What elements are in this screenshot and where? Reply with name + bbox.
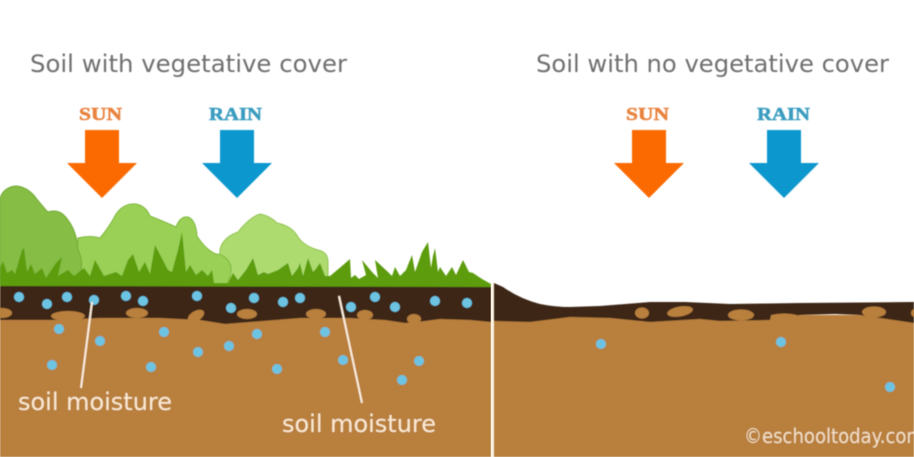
moisture dots right: [596, 337, 895, 392]
ground: dark topsoil: [0, 284, 491, 324]
leader line 2: [339, 296, 362, 403]
ground: brown subsoil: [494, 315, 914, 457]
ground: dark topsoil: [494, 283, 914, 323]
divider: [491, 283, 494, 457]
panel: soil with no vegetative cover: [494, 50, 914, 457]
moisture dots left: [14, 291, 472, 385]
heading: left panel: Soil with vegetative cover: [30, 50, 347, 78]
panel: soil with vegetative cover: [0, 50, 491, 457]
heading: right panel: Soil with no vegetative cover: [536, 50, 889, 78]
label: soil moisture 2: soil moisture: [282, 410, 436, 438]
arrow: sun right: [614, 130, 684, 198]
icon: light bush right: [218, 214, 328, 285]
label: sun left: SUN: [79, 104, 122, 124]
label: rain right: RAIN: [757, 104, 810, 124]
arrow: rain right: [749, 130, 819, 198]
label: sun right: SUN: [626, 104, 669, 124]
arrow: rain left: [202, 130, 272, 198]
leader line 1: [81, 302, 92, 388]
label: rain left: RAIN: [209, 104, 262, 124]
icon: medium bush middle: [76, 204, 231, 285]
icon: dark bush left: [0, 186, 82, 285]
label: soil moisture 1: soil moisture: [18, 388, 172, 416]
ground: brown subsoil: [0, 312, 491, 457]
rocks: [0, 307, 421, 325]
icon: grass: [0, 232, 491, 287]
rocks: [635, 304, 914, 320]
arrow: sun left: [67, 130, 137, 198]
